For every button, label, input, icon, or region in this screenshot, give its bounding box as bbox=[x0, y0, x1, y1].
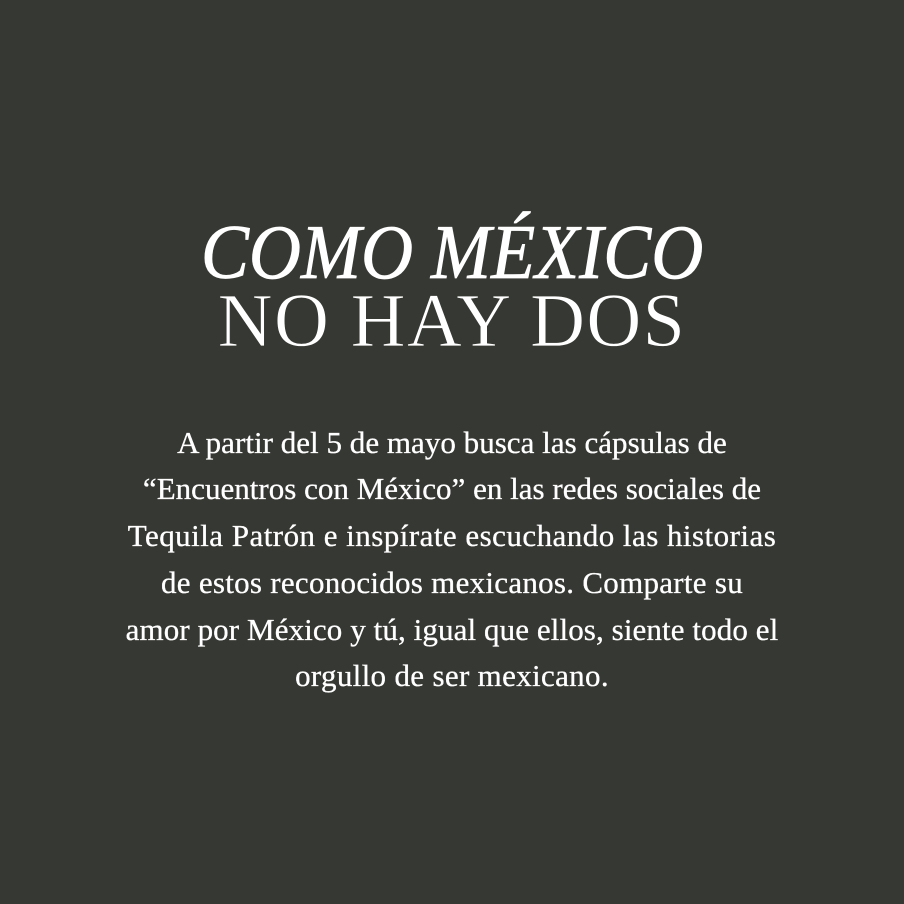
body text: A partir del 5 de mayo busca las cápsulas de bbox=[177, 424, 727, 460]
title line 1: COMO MÉXICO bbox=[201, 209, 703, 295]
title line 2: NO HAY DOS bbox=[218, 279, 686, 363]
title bbox=[201, 209, 703, 363]
body text: Tequila Patrón e inspírate escuchando las historias bbox=[128, 518, 776, 553]
body text: orgullo de ser mexicano. bbox=[295, 658, 609, 693]
body text bbox=[126, 424, 778, 693]
body text: de estos reconocidos mexicanos. Comparte su bbox=[161, 565, 743, 600]
body text: amor por México y tú, igual que ellos, siente todo el bbox=[126, 612, 778, 647]
body text: “Encuentros con México” en las redes sociales de bbox=[143, 471, 761, 506]
